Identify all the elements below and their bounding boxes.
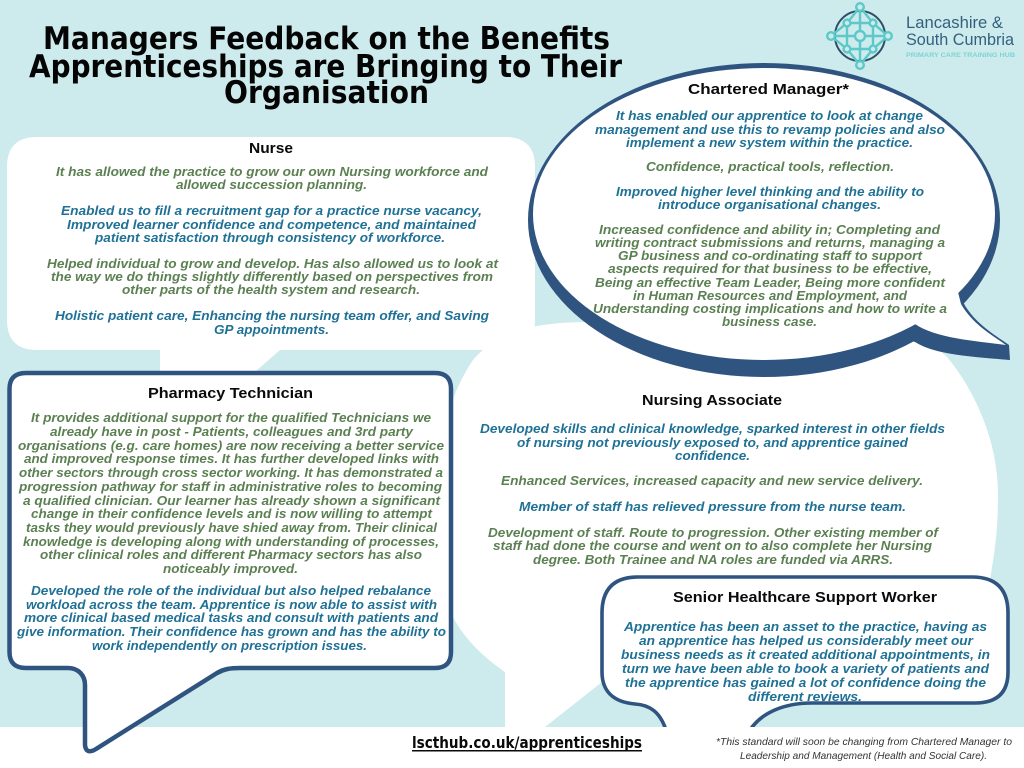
panel: Nurse	[7, 137, 535, 385]
text block: Pharmacy Technician feedback: a qualified clinician. Our learner has already shown a significant	[23, 493, 441, 508]
text block: Nurse feedback: Enabled us to fill a recruitment gap for a practice nurse vacancy,	[61, 203, 482, 218]
heading: Nurse: Nurse	[249, 140, 293, 157]
text block: Chartered Manager feedback: GP business and co-ordinating staff to support	[618, 248, 923, 263]
text block: Pharmacy Technician feedback: progression pathway for staff in administrative roles to becoming	[18, 479, 442, 494]
text block: Senior Healthcare Support Worker feedback	[621, 619, 990, 704]
heading: Pharmacy Technician: Pharmacy Technician	[148, 385, 313, 402]
text block: Senior Healthcare Support Worker feedback: turn we have been able to book a variety of patients and	[622, 661, 990, 676]
text block: Nursing Associate feedback: degree. Both Trainee and NA roles are funded via ARRS.	[533, 552, 893, 567]
text block: Chartered Manager feedback: introduce organisational changes.	[658, 197, 881, 212]
icon: network circle	[827, 3, 892, 69]
title	[29, 21, 623, 111]
text block: Nursing Associate feedback: confidence.	[675, 448, 750, 463]
text block: Senior Healthcare Support Worker feedback: an apprentice has helped us considerably meet our	[639, 633, 974, 648]
text block: Nursing Associate feedback: Member of staff has relieved pressure from the nurse team.	[519, 499, 906, 514]
text block: Pharmacy Technician feedback: more clinical based medical tasks and consult with patients and	[24, 610, 439, 625]
text block: Chartered Manager feedback: Understanding costing implications and how to write a	[593, 301, 947, 316]
text block: Nurse feedback: patient satisfaction through consistency of workforce.	[94, 230, 445, 245]
text block: Chartered Manager feedback: in Human Resources and Employment, and	[633, 288, 908, 303]
text block: Chartered Manager feedback: Confidence, practical tools, reflection.	[646, 159, 894, 174]
link: website address: lscthub.co.uk/apprenticeships	[412, 733, 642, 752]
heading: Senior Healthcare Support Worker: Senior Healthcare Support Worker	[673, 589, 937, 606]
text block: Pharmacy Technician feedback: give information. Their confidence has grown and has the ability to	[16, 624, 446, 639]
text block: Nursing Associate feedback	[480, 421, 945, 567]
title: Apprenticeships are Bringing to Their	[29, 49, 623, 85]
text block: Nursing Associate feedback: Development of staff. Route to progression. Other existing member of	[488, 525, 940, 540]
text block: Senior Healthcare Support Worker feedback: Apprentice has been an asset to the practice, having as	[623, 619, 987, 634]
footnote	[716, 736, 1012, 762]
text block: Nurse feedback: allowed succession planning.	[176, 177, 367, 192]
text block: Pharmacy Technician feedback: noticeably improved.	[163, 561, 298, 576]
title: Managers Feedback on the Benefits	[43, 21, 610, 57]
text block: Chartered Manager feedback: Improved higher level thinking and the ability to	[616, 184, 924, 199]
text block: Nurse feedback	[47, 164, 499, 337]
text block: Nursing Associate feedback: Developed skills and clinical knowledge, sparked interest in other fields	[480, 421, 945, 436]
panel: Pharmacy Technician	[10, 373, 451, 751]
text block: Chartered Manager feedback: implement a new system within the practice.	[626, 135, 913, 150]
text block: Nursing Associate feedback: staff had done the course and went on to also complete her Nursing	[493, 538, 932, 553]
text block: Pharmacy Technician feedback: organisations (e.g. care homes) are now receiving a better service	[18, 438, 444, 453]
text block: Senior Healthcare Support Worker feedback: different reviews.	[748, 689, 862, 704]
text block: Chartered Manager feedback: It has enabled our apprentice to look at change	[616, 108, 923, 123]
text block: Chartered Manager feedback: aspects required for that business to be effective,	[608, 261, 932, 276]
text block: Pharmacy Technician feedback: workload across the team. Apprentice is now able to assist with	[26, 597, 437, 612]
text block: Chartered Manager feedback: writing contract submissions and returns, managing a	[595, 235, 945, 250]
footnote: Leadership and Management (Health and Social Care).	[740, 750, 987, 762]
text block: Nurse feedback: GP appointments.	[214, 322, 329, 337]
text block: Nursing Associate feedback: of nursing not previously exposed to, and apprentice gained	[517, 435, 909, 450]
text block: Chartered Manager feedback: management and use this to revamp policies and also	[595, 122, 945, 137]
text block: Nurse feedback: other parts of the health system and research.	[122, 282, 420, 297]
logo: Lancashire and South Cumbria Primary Care Training Hub	[827, 3, 1015, 69]
text block: Pharmacy Technician feedback	[16, 410, 446, 653]
logo wordmark: PRIMARY CARE TRAINING HUB	[906, 52, 1015, 59]
panel: Chartered Manager	[528, 63, 1010, 377]
text block: Pharmacy Technician feedback: work independently on prescription issues.	[92, 638, 367, 653]
text block: Pharmacy Technician feedback: and improved response times. It has further developed links with	[24, 451, 439, 466]
heading: Nursing Associate: Nursing Associate	[642, 392, 782, 409]
panel: Nursing Associate	[434, 322, 998, 727]
text block: Nurse feedback: the way we do things slightly differently based on perspectives from	[51, 269, 493, 284]
text block: Chartered Manager feedback: Increased confidence and ability in; Completing and	[599, 222, 941, 237]
footnote: *This standard will soon be changing from Chartered Manager to	[716, 736, 1012, 748]
heading: Chartered Manager: Chartered Manager*	[688, 81, 849, 98]
text block: Chartered Manager feedback: Being an effective Team Leader, Being more confident	[595, 275, 946, 290]
text block: Pharmacy Technician feedback: It provides additional support for the qualified Technicians we	[31, 410, 431, 425]
text block: Nurse feedback: Improved learner confidence and competence, and maintained	[67, 217, 477, 232]
logo wordmark: South Cumbria	[906, 30, 1015, 49]
panel: Senior Healthcare Support Worker	[602, 577, 1008, 730]
text block: Chartered Manager feedback	[593, 108, 947, 329]
text block: Nursing Associate feedback: Enhanced Services, increased capacity and new service delivery.	[501, 473, 923, 488]
text block: Pharmacy Technician feedback: tasks they would previously have shied away from. Their clinical	[26, 520, 437, 535]
logo wordmark: Lancashire &	[906, 13, 1004, 32]
logo wordmark	[906, 13, 1015, 59]
text block: Pharmacy Technician feedback: knowledge is developing along with understanding of processes,	[23, 534, 439, 549]
text block: Nurse feedback: It has allowed the practice to grow our own Nursing workforce and	[56, 164, 489, 179]
text block: Senior Healthcare Support Worker feedback: the apprentice has gained a lot of confidence doing the	[625, 675, 986, 690]
text block: Pharmacy Technician feedback: already have in post - Patients, colleagues and 3rd party	[50, 424, 414, 439]
text block: Nurse feedback: Holistic patient care, Enhancing the nursing team offer, and Saving	[55, 308, 489, 323]
text block: Pharmacy Technician feedback: Developed the role of the individual but also helped rebalance	[31, 583, 431, 598]
text block: Pharmacy Technician feedback: other sectors through cross sector working. It has demonstrated a	[19, 465, 443, 480]
text block: Pharmacy Technician feedback: change in their confidence levels and is now willing to attempt	[31, 506, 433, 521]
text block: Nurse feedback: Helped individual to grow and develop. Has also allowed us to look at	[47, 256, 499, 271]
title: Organisation	[224, 75, 429, 111]
footer band	[0, 727, 1024, 768]
text block: Senior Healthcare Support Worker feedback: business needs as it created additional appointments, in	[621, 647, 990, 662]
text block: Pharmacy Technician feedback: other clinical roles and different Pharmacy sectors has also	[40, 547, 422, 562]
text block: Chartered Manager feedback: business case.	[722, 314, 817, 329]
